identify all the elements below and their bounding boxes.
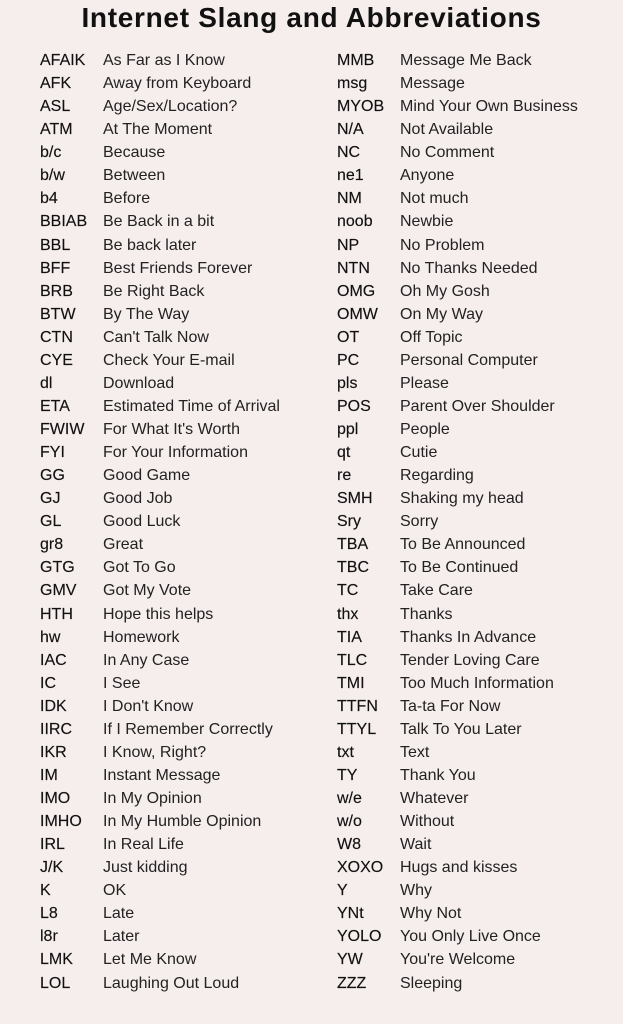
column: left list: Be back later [103, 236, 196, 254]
column: right list: To Be Continued [400, 559, 518, 576]
column: left list: Check Your E-mail [103, 352, 235, 369]
column: left list: Got My Vote [103, 582, 191, 599]
column: right list: thx [337, 606, 358, 622]
column: right list: OMW [337, 306, 378, 323]
column: right list: TBC [337, 559, 369, 576]
column: left list: Away from Keyboard [103, 75, 251, 92]
column: right list: YOLO [337, 928, 381, 945]
column: right list: NM [337, 190, 362, 207]
column: right list: YW [337, 951, 363, 968]
column: left list: ATM [40, 121, 73, 138]
column: right list: Mind Your Own Business [400, 98, 578, 115]
column: left list: Good Job [103, 490, 172, 507]
column: right list: Take Care [400, 582, 473, 599]
column: right list: Without [400, 813, 454, 830]
column: left list: BTW [40, 306, 76, 323]
column: left list: BFF [40, 260, 70, 277]
column: right list: Tender Loving Care [400, 652, 540, 669]
column: right list: Newbie [400, 213, 453, 230]
column: right list: SMH [337, 490, 373, 507]
column: right list: TLC [337, 652, 367, 669]
column: left list: Be Back in a bit [103, 213, 214, 230]
column: left list: J/K [40, 859, 63, 876]
column: left list: Let Me Know [103, 951, 196, 968]
column: right list [336, 52, 578, 992]
column: left list: I Don't Know [103, 698, 193, 715]
column: right list: Hugs and kisses [400, 859, 517, 876]
column: right list: w/e [337, 790, 362, 807]
column: left list: Best Friends Forever [103, 260, 252, 277]
column: right list: XOXO [337, 859, 383, 876]
column: right list: Personal Computer [400, 352, 538, 369]
column: right list: TMI [337, 675, 365, 692]
column: left list: Instant Message [103, 767, 220, 784]
column: left list: IDK [40, 698, 67, 715]
column: left list: CTN [40, 329, 73, 346]
column: left list: Before [103, 190, 150, 207]
column: right list: txt [337, 744, 354, 761]
column: right list: Thanks [400, 606, 452, 622]
column: left list: At The Moment [103, 121, 212, 138]
column: left list: IIRC [40, 721, 72, 738]
column: right list: re [337, 467, 351, 484]
column: right list: TY [337, 767, 357, 784]
column: right list: On My Way [400, 306, 483, 323]
column: left list: Good Luck [103, 513, 180, 530]
column: left list [40, 52, 280, 992]
column: right list: MMB [337, 52, 374, 69]
column: left list: Just kidding [103, 859, 188, 876]
column: left list: l8r [40, 928, 58, 945]
column: left list: In My Humble Opinion [103, 813, 261, 830]
column: right list: Parent Over Shoulder [400, 398, 555, 415]
column: right list: NTN [337, 260, 370, 277]
column: right list: Why Not [400, 905, 461, 922]
column: left list: Homework [103, 629, 179, 646]
column: left list: L8 [40, 905, 58, 922]
column: left list: In Real Life [103, 836, 184, 853]
column: right list: You're Welcome [400, 951, 515, 968]
column: left list: ASL [40, 98, 70, 115]
column: left list: FYI [40, 444, 65, 461]
column: right list: Y [337, 882, 348, 899]
column: right list: ne1 [337, 167, 364, 184]
column: right list: TIA [337, 629, 362, 646]
column: left list: Download [103, 375, 174, 392]
column: left list: FWIW [40, 421, 84, 438]
column: left list: b/c [40, 144, 61, 161]
column: left list: IM [40, 767, 58, 784]
column: left list: In Any Case [103, 652, 189, 669]
column: left list: IMHO [40, 813, 82, 830]
column: right list: W8 [337, 836, 361, 853]
column: right list: MYOB [337, 98, 384, 115]
column: left list: IKR [40, 744, 67, 761]
column: right list: Message Me Back [400, 52, 532, 69]
column: right list: TBA [337, 536, 368, 553]
column: left list: For Your Information [103, 444, 248, 461]
column: left list: dl [40, 375, 52, 392]
column: right list: Anyone [400, 167, 454, 184]
column: right list: To Be Announced [400, 536, 525, 553]
column: left list: LMK [40, 951, 73, 968]
column: right list: POS [337, 398, 371, 415]
column: right list: noob [337, 213, 373, 230]
column: right list: Why [400, 882, 432, 899]
column: right list: TTYL [337, 721, 376, 738]
column: right list: NC [337, 144, 360, 161]
column: left list: GTG [40, 559, 75, 576]
column: left list: OK [103, 882, 126, 899]
column: right list: w/o [337, 813, 362, 830]
column: right list: No Thanks Needed [400, 260, 538, 277]
column: right list: OMG [337, 283, 375, 300]
column: right list: pls [337, 375, 357, 392]
column: right list: Regarding [400, 467, 474, 484]
column: left list: BBL [40, 236, 70, 254]
column: right list: Please [400, 375, 449, 392]
column: right list: Off Topic [400, 329, 463, 346]
column: right list: OT [337, 329, 359, 346]
column: right list: Too Much Information [400, 675, 554, 692]
column: left list: Laughing Out Loud [103, 974, 239, 992]
column: right list: You Only Live Once [400, 928, 541, 945]
column: left list: AFAIK [40, 52, 85, 69]
column: right list: Whatever [400, 790, 468, 807]
column: left list: IC [40, 675, 56, 692]
column: left list: For What It's Worth [103, 421, 240, 438]
column: left list: Age/Sex/Location? [103, 98, 237, 115]
column: left list: GJ [40, 490, 60, 507]
column: left list: If I Remember Correctly [103, 721, 273, 738]
column: left list: IMO [40, 790, 70, 807]
column: left list: BRB [40, 283, 73, 300]
column: left list: b/w [40, 167, 65, 184]
column: left list: gr8 [40, 536, 63, 553]
column: left list: b4 [40, 190, 58, 207]
column: right list: Not much [400, 190, 468, 207]
column: right list: No Comment [400, 144, 494, 161]
column: left list: AFK [40, 75, 71, 92]
column: left list: IRL [40, 836, 65, 853]
column: right list: NP [337, 236, 359, 254]
column: right list: Sry [337, 513, 361, 530]
column: left list: LOL [40, 974, 70, 992]
column: left list: Because [103, 144, 165, 161]
column: left list: I Know, Right? [103, 744, 206, 761]
column: left list: Hope this helps [103, 606, 213, 622]
column: right list: Sleeping [400, 974, 462, 992]
column: right list: Wait [400, 836, 431, 853]
column: left list: BBIAB [40, 213, 87, 230]
column: right list: Text [400, 744, 429, 761]
column: right list: msg [337, 75, 367, 92]
column: right list: Thank You [400, 767, 476, 784]
column: left list: Estimated Time of Arrival [103, 398, 280, 415]
column: right list: ZZZ [337, 974, 366, 992]
column: left list: CYE [40, 352, 73, 369]
column: left list: HTH [40, 606, 73, 622]
column: right list: TC [337, 582, 358, 599]
column: right list: YNt [337, 905, 364, 922]
column: left list: Between [103, 167, 165, 184]
column: right list: Talk To You Later [400, 721, 522, 738]
column: right list: Sorry [400, 513, 438, 530]
column: right list: TTFN [337, 698, 378, 715]
column: left list: GL [40, 513, 61, 530]
column: right list: ppl [337, 421, 358, 438]
column: left list: By The Way [103, 306, 189, 323]
column: left list: hw [40, 629, 60, 646]
column: left list: Later [103, 928, 139, 945]
column: left list: As Far as I Know [103, 52, 225, 69]
column: right list: qt [337, 444, 350, 461]
column: right list: Message [400, 75, 465, 92]
column: left list: GMV [40, 582, 76, 599]
column: right list: People [400, 421, 450, 438]
column: left list: K [40, 882, 51, 899]
column: left list: Be Right Back [103, 283, 204, 300]
column: left list: In My Opinion [103, 790, 202, 807]
column: right list: Ta-ta For Now [400, 698, 500, 715]
column: left list: Can't Talk Now [103, 329, 209, 346]
column: right list: Thanks In Advance [400, 629, 536, 646]
column: right list: No Problem [400, 236, 484, 254]
column: right list: N/A [337, 121, 364, 138]
column: right list: Cutie [400, 444, 437, 461]
column: right list: Not Available [400, 121, 493, 138]
column: left list: Got To Go [103, 559, 176, 576]
title: Internet Slang and Abbreviations [81, 2, 542, 33]
column: right list: PC [337, 352, 359, 369]
column: left list: ETA [40, 398, 70, 415]
column: left list: Good Game [103, 467, 190, 484]
column: left list: IAC [40, 652, 67, 669]
column: left list: GG [40, 467, 65, 484]
column: right list: Shaking my head [400, 490, 524, 507]
column: left list: Late [103, 905, 134, 922]
column: left list: I See [103, 675, 140, 692]
column: right list: Oh My Gosh [400, 283, 490, 300]
column: left list: Great [103, 536, 143, 553]
